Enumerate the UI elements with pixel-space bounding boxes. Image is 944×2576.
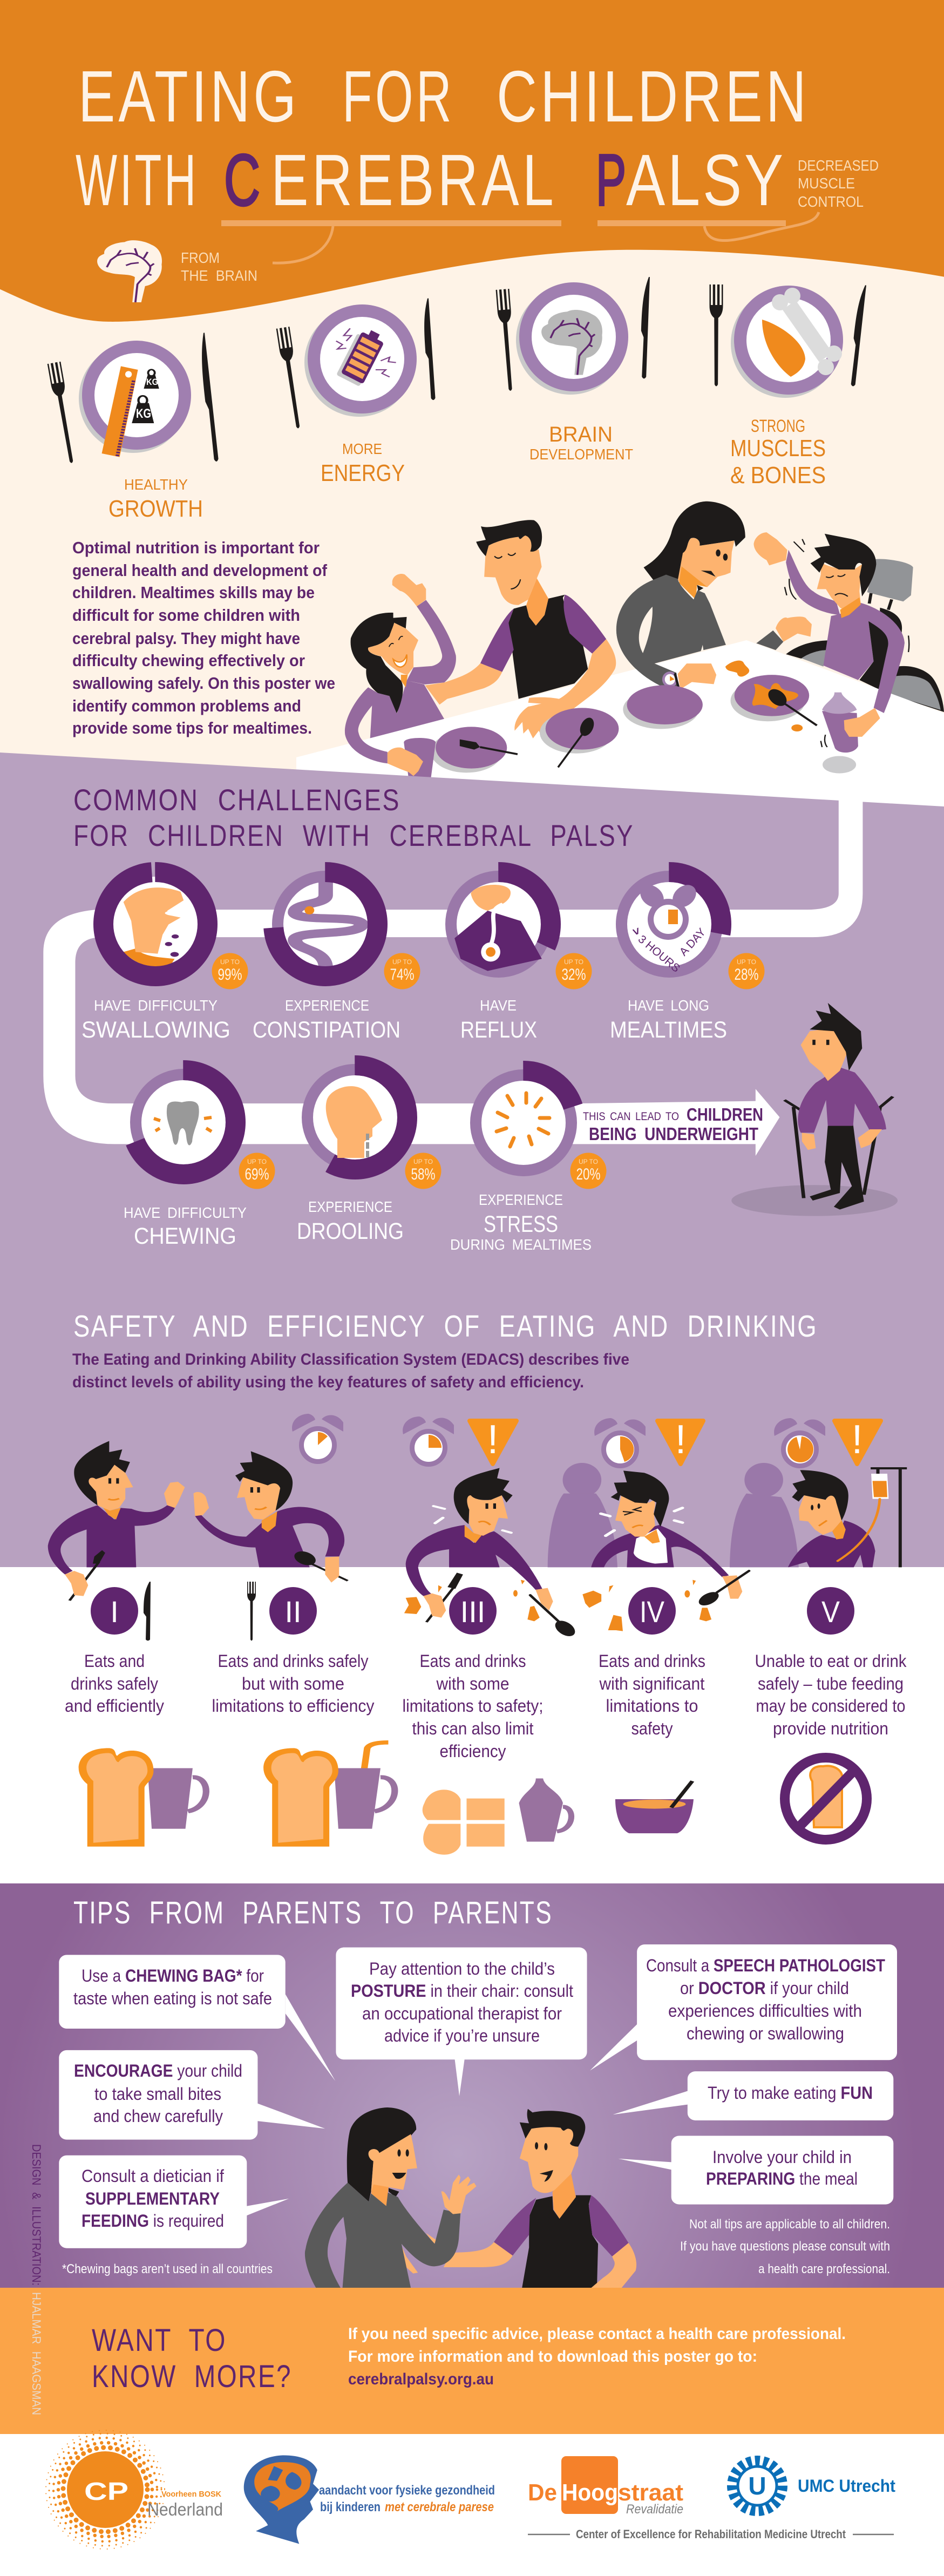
clocks — [292, 1414, 825, 1466]
tips section background — [0, 1883, 944, 2288]
level IV text: limitations to — [606, 1696, 698, 1716]
figure III right arm hand and spoon — [530, 1588, 579, 1639]
mother and child behind table — [616, 501, 944, 712]
label chewing — [124, 1204, 247, 1249]
bubble: supplementary feeding — [59, 2155, 289, 2248]
cream background — [0, 0, 944, 810]
badge 32 — [556, 953, 592, 989]
from the brain label — [181, 249, 257, 284]
orange header wave — [0, 0, 944, 322]
badge 74: 74% — [390, 966, 415, 984]
EDACS description: distinct levels of ability using the key features of safety and efficiency. — [72, 1373, 584, 1391]
badge 99: UP TO — [220, 958, 240, 966]
mother's hand and watch — [662, 663, 716, 689]
title: ALSY — [626, 139, 786, 221]
label stress: STRESS — [484, 1211, 558, 1237]
logo: De Hoogstraat — [528, 2456, 683, 2517]
icon: tooth — [167, 1101, 199, 1145]
want to know more heading: WANT TO — [92, 2323, 227, 2358]
cut toast and lidded cup III — [423, 1778, 571, 1855]
tip text: preparing: PREPARING the meal — [706, 2169, 858, 2188]
EDACS description — [72, 1351, 629, 1391]
label swallowing: SWALLOWING — [82, 1017, 230, 1043]
child — [753, 532, 909, 689]
label drooling: EXPERIENCE — [308, 1198, 392, 1215]
logo: head with brain: met cerebrale parese — [385, 2500, 494, 2514]
logo: UMC Utrecht: U — [748, 2472, 766, 2500]
label chewing: CHEWING — [134, 1223, 236, 1249]
EDACS description: The Eating and Drinking Ability Classification System (EDACS) describes five — [72, 1351, 629, 1368]
more energy label: MORE — [342, 440, 382, 457]
tip text: posture: Pay attention to the child’s — [369, 1959, 555, 1978]
level V text: Unable to eat or drink — [755, 1651, 907, 1671]
clock caption: 3 HOURS — [636, 933, 682, 975]
clock caption: A DAY — [677, 926, 708, 958]
strong muscles and bones label: MUSCLES — [730, 435, 826, 462]
arrow text: underweight: BEING UNDERWEIGHT — [589, 1124, 758, 1144]
logo: CP Nederland: Voorheen BOSK — [161, 2490, 221, 2499]
tip text: speech pathologist: experiences difficulties with — [668, 2001, 862, 2021]
tip text: supplementary feeding: Consult a dietician if — [82, 2166, 224, 2186]
underweight child with crutches — [731, 1003, 898, 1216]
white band for levels — [0, 1567, 944, 1883]
background silhouettes — [548, 1463, 799, 1567]
weight labels: KG — [146, 377, 158, 387]
clock caption: > — [629, 926, 644, 937]
donut: mealtimes 28% — [617, 872, 721, 976]
bubble: preparing — [619, 2136, 893, 2205]
badge 20: UP TO — [579, 1158, 598, 1165]
intro paragraph: general health and development of — [72, 561, 328, 580]
more energy label: ENERGY — [321, 460, 405, 486]
strong muscles and bones label: STRONG — [751, 416, 805, 436]
note: decreased muscle control: DECREASED — [798, 157, 879, 174]
father's torso — [480, 595, 606, 699]
label mealtimes — [610, 997, 727, 1043]
logo: De Hoogstraat: Revalidatie — [626, 2502, 683, 2517]
girl — [351, 574, 456, 738]
logo: CP Nederland: Nederland — [147, 2499, 223, 2519]
title: EATING — [78, 56, 300, 137]
plate: healthy growth — [47, 333, 219, 464]
icon: brain grey — [541, 310, 602, 375]
father's head — [476, 520, 548, 626]
arrow text: underweight — [583, 1104, 763, 1144]
note: decreased muscle control: CONTROL — [798, 193, 864, 210]
toast and mug with straw II — [263, 1743, 395, 1847]
donut: stress 20% — [472, 1071, 575, 1175]
icon: bone — [772, 288, 842, 375]
tip text: preparing — [706, 2147, 858, 2188]
badge 28: 28% — [734, 966, 759, 984]
badge 74 — [384, 953, 420, 989]
tip text: chewing bag — [73, 1966, 272, 2008]
wheelchair — [786, 559, 944, 712]
icon: torso and reflux — [454, 885, 542, 971]
bowl IV — [615, 1781, 694, 1833]
more energy label — [321, 440, 405, 486]
percent badges — [212, 953, 764, 1189]
contact text: If you need specific advice, please contact a health care professional. — [348, 2325, 846, 2343]
icon: ruler and weights — [102, 366, 159, 457]
logo: De Hoogstraat: De — [528, 2479, 557, 2506]
from the brain label: FROM — [181, 249, 220, 266]
level III text: efficiency — [439, 1741, 506, 1761]
orange call to action band — [0, 2288, 944, 2434]
contact text: cerebralpalsy.org.au — [348, 2370, 494, 2388]
food icons for each level — [79, 1743, 694, 1855]
level III text — [403, 1651, 543, 1761]
fork beside II — [247, 1582, 256, 1640]
tip text: preparing: Involve your child in — [712, 2147, 852, 2167]
warning IV — [657, 1416, 703, 1464]
tip text: posture — [351, 1959, 573, 2045]
level I text — [65, 1651, 164, 1716]
badge 99: 99% — [218, 966, 242, 984]
tip text: speech pathologist: or DOCTOR if your child — [680, 1978, 849, 1998]
level I text: and efficiently — [65, 1696, 164, 1716]
center of excellence line: Center of Excellence for Rehabilitation Medicine Utrecht — [576, 2527, 846, 2541]
tip text: speech pathologist — [646, 1956, 885, 2043]
badge I — [91, 1587, 138, 1635]
child's plate with food and spoon — [730, 675, 817, 731]
level II text — [212, 1651, 375, 1716]
badge 69: UP TO — [247, 1158, 267, 1165]
level IV text: Eats and drinks — [599, 1651, 705, 1671]
label mealtimes: MEALTIMES — [610, 1017, 727, 1043]
level I text: drinks safely — [71, 1674, 158, 1693]
heading: tips: TIPS FROM PARENTS TO PARENTS — [73, 1895, 553, 1930]
logo: head with brain — [244, 2455, 495, 2544]
bubble: speech pathologist — [590, 1944, 897, 2071]
weight labels: KG — [136, 406, 151, 421]
icon: intestines — [295, 875, 361, 967]
figure II — [193, 1451, 348, 1583]
level III text: with some — [436, 1674, 510, 1693]
level V text: provide nutrition — [773, 1719, 888, 1738]
logo: De Hoogstraat: straat — [618, 2479, 683, 2506]
tip text: chewing bag: Use a CHEWING BAG* for — [82, 1966, 264, 1985]
badge IV: IV — [640, 1595, 665, 1629]
want to know more heading: KNOW MORE? — [92, 2359, 292, 2394]
label drooling: DROOLING — [297, 1218, 404, 1244]
tip text: encourage: and chew carefully — [93, 2106, 223, 2126]
icon: stress burst — [497, 1093, 549, 1147]
badge 58: 58% — [411, 1165, 435, 1183]
no food icon V — [785, 1758, 867, 1840]
challenge labels — [82, 997, 727, 1253]
mother's plate — [623, 685, 703, 729]
label reflux — [460, 997, 537, 1043]
badge 28: UP TO — [737, 958, 756, 966]
table top — [296, 640, 944, 810]
heading: common challenges — [73, 783, 634, 852]
title: EREBRAL — [271, 139, 557, 221]
girl's arm and cup — [345, 687, 436, 779]
clock II — [292, 1414, 343, 1462]
level V text: safely – tube feeding — [758, 1674, 904, 1693]
disclaimer: Not all tips are applicable to all children. — [689, 2217, 890, 2232]
strong muscles and bones label: & BONES — [730, 462, 826, 489]
plate: more energy — [276, 299, 436, 429]
badge 20 — [570, 1153, 607, 1189]
label stress — [450, 1191, 592, 1253]
father's arm, girl's arm and plates on table — [345, 639, 619, 779]
father and girl behind table — [351, 520, 606, 738]
girl's plate and fork — [431, 727, 518, 772]
donut: constipation 74% — [273, 872, 378, 976]
title: P — [596, 139, 626, 221]
title: C — [224, 139, 260, 221]
logo: CP Nederland: CP — [84, 2477, 128, 2505]
donut: reflux 32% — [447, 872, 551, 976]
tip text: encourage: ENCOURAGE your child — [74, 2061, 242, 2080]
level IV text: safety — [631, 1719, 673, 1738]
plate: strong muscles and bones — [709, 284, 866, 398]
label constipation — [253, 997, 400, 1043]
label chewing: HAVE DIFFICULTY — [124, 1204, 247, 1221]
disclaimer: If you have questions please consult with — [680, 2239, 890, 2254]
badge V — [807, 1587, 854, 1635]
tip text: posture: an occupational therapist for — [362, 2004, 562, 2023]
figure III — [404, 1468, 542, 1622]
from the brain label: THE BRAIN — [181, 267, 257, 284]
disclaimer — [680, 2217, 890, 2276]
note: decreased muscle control — [798, 157, 879, 210]
figure IV — [591, 1470, 749, 1608]
intro paragraph: swallowing safely. On this poster we — [72, 674, 335, 693]
orange food spill — [725, 661, 749, 677]
heading: common challenges: FOR CHILDREN WITH CEREBRAL PALSY — [73, 818, 634, 852]
middle plate and spoon — [540, 708, 619, 767]
white road and arrow — [43, 794, 862, 1156]
logo: De Hoogstraat: Hoog — [562, 2479, 618, 2506]
level IV text — [599, 1651, 705, 1738]
level III text: limitations to safety; — [403, 1696, 543, 1716]
label swallowing — [82, 997, 230, 1043]
level badges — [91, 1587, 854, 1635]
warning IV: ! — [675, 1416, 686, 1462]
warning triangles — [470, 1416, 881, 1464]
level III text: Eats and drinks — [420, 1651, 526, 1671]
tip text: encourage: to take small bites — [94, 2084, 221, 2104]
badge IV — [628, 1587, 676, 1635]
level V text — [755, 1651, 907, 1738]
warning III: ! — [487, 1416, 498, 1462]
brain development label: BRAIN — [549, 423, 613, 446]
child's cup — [821, 693, 858, 774]
drip stand — [838, 1468, 907, 1567]
badge 74: UP TO — [392, 958, 412, 966]
tip text: posture: advice if you’re unsure — [384, 2026, 540, 2045]
food splats — [513, 1580, 711, 1631]
warning III — [470, 1416, 517, 1464]
vertical design credit — [30, 2144, 43, 2415]
badge III: III — [460, 1595, 485, 1629]
level II text: Eats and drinks safely — [218, 1651, 368, 1671]
intro paragraph: identify common problems and — [72, 696, 301, 715]
want to know more heading — [92, 2323, 292, 2394]
tip text: speech pathologist: chewing or swallowing — [687, 2024, 844, 2043]
clock IV — [594, 1418, 646, 1466]
tip text: supplementary feeding: FEEDING is required — [82, 2211, 224, 2231]
icon: head swallowing — [124, 887, 196, 968]
warning V: ! — [852, 1416, 862, 1462]
donut: chewing 69% — [132, 1070, 235, 1175]
logo: head with brain: bij kinderen — [320, 2500, 381, 2514]
tip text: posture: POSTURE in their chair: consult — [351, 1981, 573, 2001]
disclaimer: a health care professional. — [758, 2262, 890, 2276]
tip text: chewing bag: taste when eating is not safe — [73, 1989, 272, 2008]
strong muscles and bones label — [730, 416, 826, 489]
intro paragraph: difficulty chewing effectively or — [72, 651, 305, 670]
arrow text: underweight: CHILDREN — [687, 1104, 763, 1124]
title underlines and connectors — [221, 212, 819, 263]
label reflux: REFLUX — [460, 1017, 537, 1043]
badge 58: UP TO — [413, 1158, 433, 1165]
bubble: chewing bag — [59, 1955, 335, 2081]
level IV text: with significant — [599, 1674, 705, 1693]
note: decreased muscle control: MUSCLE — [798, 175, 855, 192]
intro paragraph — [72, 538, 335, 737]
level figures I to III — [48, 1441, 542, 1622]
clock III — [403, 1416, 454, 1464]
icon: brain in header — [97, 240, 162, 302]
badge 28 — [729, 953, 764, 989]
title — [76, 56, 810, 221]
tip text: encourage — [74, 2061, 242, 2126]
logo: UMC Utrecht — [732, 2460, 895, 2511]
intro paragraph: cerebral palsy. They might have — [72, 629, 300, 648]
label stress: EXPERIENCE — [479, 1191, 563, 1208]
parents talking illustration — [305, 2107, 636, 2288]
title: WITH — [76, 139, 199, 221]
healthy growth label: HEALTHY — [124, 476, 188, 493]
badge 20: 20% — [576, 1165, 600, 1183]
logo: head with brain: aandacht voor fysieke gezondheid — [319, 2483, 495, 2498]
vertical design credit: DESIGN & ILLUSTRATION: — [30, 2144, 43, 2286]
healthy growth label — [108, 476, 203, 522]
weight labels — [136, 377, 158, 421]
brain development label — [529, 423, 633, 463]
intro paragraph: difficult for some children with — [72, 606, 300, 625]
icon: drooling head — [326, 1086, 382, 1158]
clock V — [774, 1418, 825, 1466]
level III text: this can also limit — [412, 1719, 534, 1738]
arrow text: underweight: THIS CAN LEAD TO — [583, 1110, 679, 1123]
label constipation: EXPERIENCE — [285, 997, 369, 1014]
family at the table illustration — [296, 501, 944, 810]
level V text: may be considered to — [756, 1696, 906, 1716]
bubble: fun — [613, 2071, 893, 2120]
badge II — [269, 1587, 317, 1635]
title: CHILDREN — [497, 56, 810, 137]
heading: common challenges: COMMON CHALLENGES — [73, 783, 400, 817]
badge 58 — [405, 1153, 442, 1189]
footnote: *Chewing bags aren’t used in all countries — [62, 2262, 273, 2276]
title: FOR — [342, 56, 454, 137]
knife beside I — [144, 1582, 151, 1640]
badge I: I — [110, 1595, 119, 1629]
label stress: DURING MEALTIMES — [450, 1236, 592, 1253]
badge III — [449, 1587, 497, 1635]
badge 99 — [212, 953, 248, 989]
badge 69: 69% — [245, 1165, 269, 1183]
badge II: II — [284, 1595, 302, 1629]
contact text — [348, 2325, 846, 2388]
level figures IV and V — [513, 1463, 907, 1639]
vertical design credit: HJALMAR HAAGSMAN — [30, 2292, 43, 2415]
woman — [305, 2107, 477, 2288]
logo: UMC Utrecht: UMC Utrecht — [798, 2476, 895, 2496]
purple challenges section background — [0, 753, 944, 1567]
tip text: speech pathologist: Consult a SPEECH PATHOLOGIST — [646, 1956, 885, 1975]
tip text: supplementary feeding — [82, 2166, 224, 2231]
label drooling — [297, 1198, 404, 1244]
icon: battery — [336, 326, 386, 388]
logo: CP Nederland — [46, 2430, 223, 2549]
mother's arm, child's arm, plate and cup on table — [616, 631, 905, 774]
label swallowing: HAVE DIFFICULTY — [94, 997, 218, 1014]
badge 32: 32% — [561, 966, 586, 984]
mother — [616, 501, 812, 689]
badge V: V — [821, 1595, 840, 1629]
label reflux: HAVE — [480, 997, 517, 1014]
level I text: Eats and — [84, 1651, 145, 1671]
icon: muscle — [762, 320, 805, 377]
label constipation: CONSTIPATION — [253, 1017, 400, 1043]
toast and mug I — [79, 1748, 206, 1847]
donut: drooling 58% — [303, 1066, 407, 1169]
man — [402, 2109, 636, 2288]
level II text: limitations to efficiency — [212, 1696, 375, 1716]
clock caption — [629, 926, 708, 975]
bubble: encourage — [59, 2050, 325, 2140]
tip text: fun: Try to make eating FUN — [708, 2083, 873, 2103]
figure V — [788, 1470, 875, 1567]
figure I — [48, 1441, 185, 1601]
speech bubbles — [59, 1944, 897, 2248]
level II text: but with some — [242, 1674, 344, 1693]
tip text: supplementary feeding: SUPPLEMENTARY — [85, 2189, 220, 2208]
plate: brain development — [496, 277, 650, 395]
donut: swallowing 99% — [104, 872, 207, 976]
child's arm and hand — [844, 635, 905, 737]
warning V — [834, 1416, 881, 1464]
icon: sparks — [336, 328, 396, 377]
healthy growth label: GROWTH — [108, 496, 203, 522]
icon: clock — [636, 880, 701, 940]
contact text: For more information and to download this poster go to: — [348, 2348, 757, 2365]
intro paragraph: provide some tips for mealtimes. — [72, 718, 312, 737]
intro paragraph: children. Mealtimes skills may be — [72, 583, 315, 602]
badge 69 — [239, 1153, 275, 1189]
brain development label: DEVELOPMENT — [529, 446, 633, 463]
label mealtimes: HAVE LONG — [628, 997, 709, 1014]
intro paragraph: Optimal nutrition is important for — [72, 538, 320, 557]
bubble: posture — [336, 1948, 587, 2096]
badge 32: UP TO — [564, 958, 583, 966]
father's arm — [425, 663, 502, 704]
